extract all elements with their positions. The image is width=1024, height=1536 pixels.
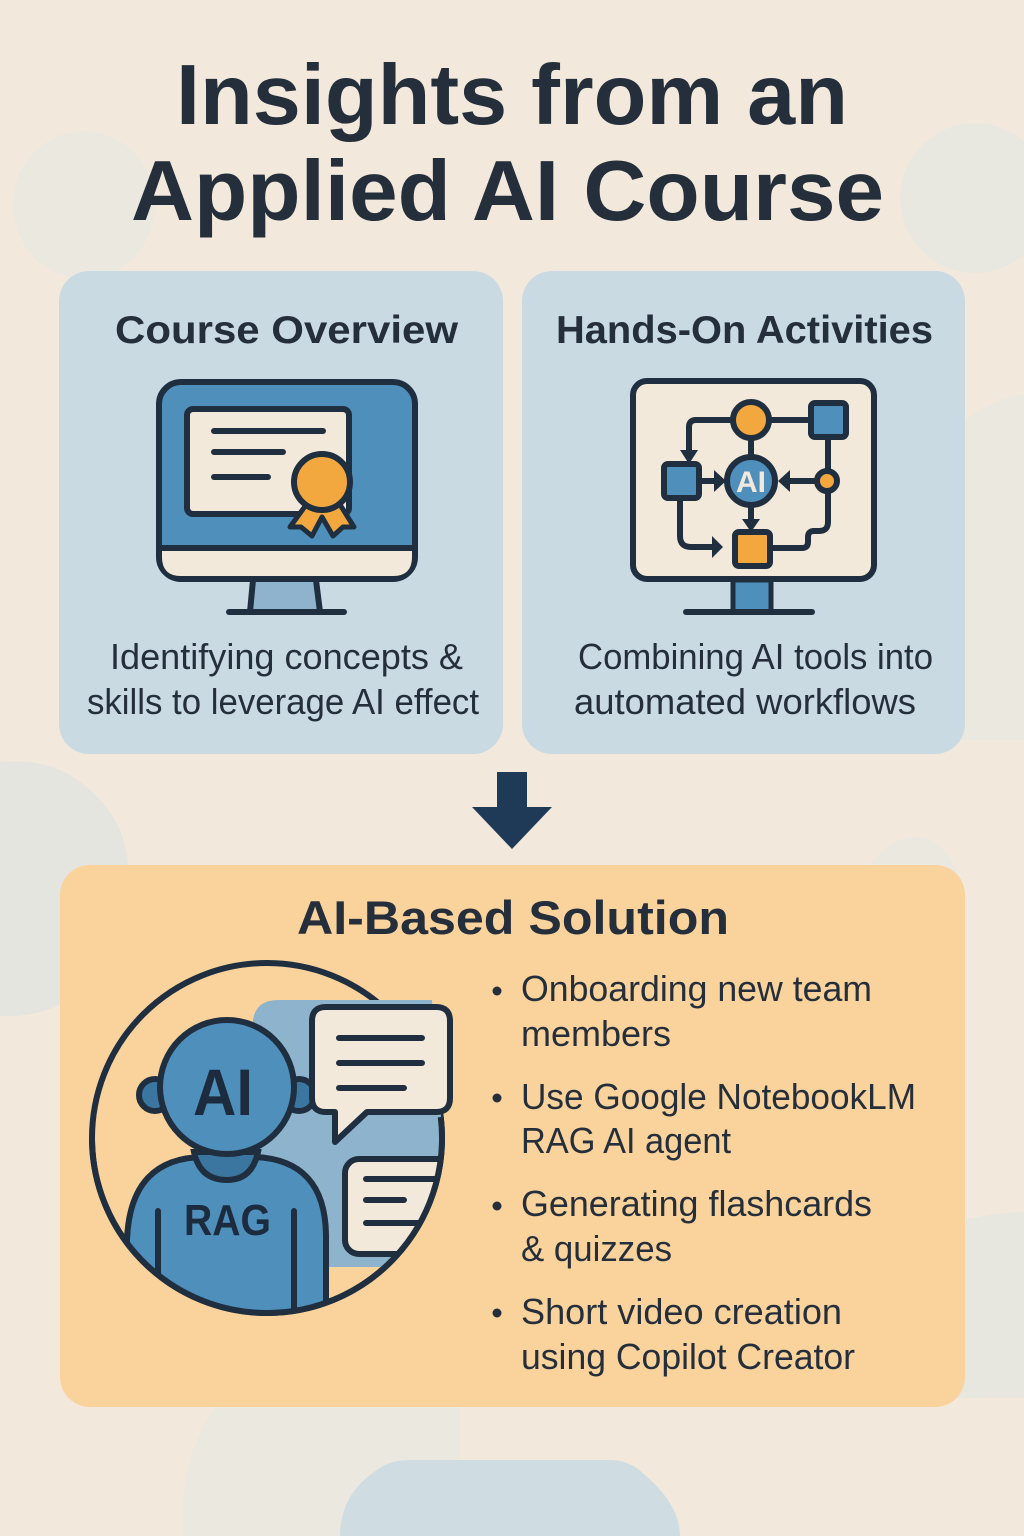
title — [131, 48, 884, 239]
list: solution bullets: members — [521, 1013, 671, 1054]
icon: speech bubble — [312, 1007, 450, 1142]
icon: monitor with certificate — [159, 382, 415, 612]
text: course overview description — [87, 636, 479, 722]
icon: RAG AI agent: AI — [193, 1055, 253, 1129]
text: hands-on description: Combining AI tools into — [578, 636, 933, 677]
arrow: down — [472, 772, 552, 849]
title: Insights from an — [176, 48, 848, 143]
icon: RAG AI agent: RAG — [184, 1196, 271, 1245]
panel: hands-on activities — [522, 271, 965, 754]
icon: RAG AI agent — [92, 963, 475, 1320]
text: course overview description: Identifying concepts & — [110, 636, 463, 677]
panel: course overview — [59, 271, 503, 754]
background blob bottom — [340, 1460, 680, 1536]
list: solution bullets: Use Google NotebookLM — [521, 1076, 916, 1117]
icon: monitor with AI workflow — [633, 381, 874, 612]
text: course overview description: skills to leverage AI effect — [87, 681, 479, 722]
list: solution bullets: Generating flashcards — [521, 1183, 872, 1224]
list: solution bullets: Short video creation — [521, 1291, 842, 1332]
title: Applied AI Course — [131, 144, 884, 239]
heading: course overview: Course Overview — [115, 309, 459, 352]
list: solution bullets: Onboarding new team — [521, 968, 872, 1009]
icon: monitor with AI workflow: AI — [736, 466, 766, 499]
text: hands-on description — [574, 636, 933, 722]
list: solution bullets: using Copilot Creator — [521, 1336, 855, 1377]
list: solution bullets: RAG AI agent — [521, 1120, 731, 1161]
heading: hands-on activities: Hands-On Activities — [556, 309, 933, 352]
panel: AI-based solution — [60, 865, 965, 1407]
list: solution bullets — [492, 968, 916, 1377]
text: hands-on description: automated workflows — [574, 681, 916, 722]
list: solution bullets: & quizzes — [521, 1228, 672, 1269]
heading: AI-based solution: AI-Based Solution — [297, 891, 729, 944]
